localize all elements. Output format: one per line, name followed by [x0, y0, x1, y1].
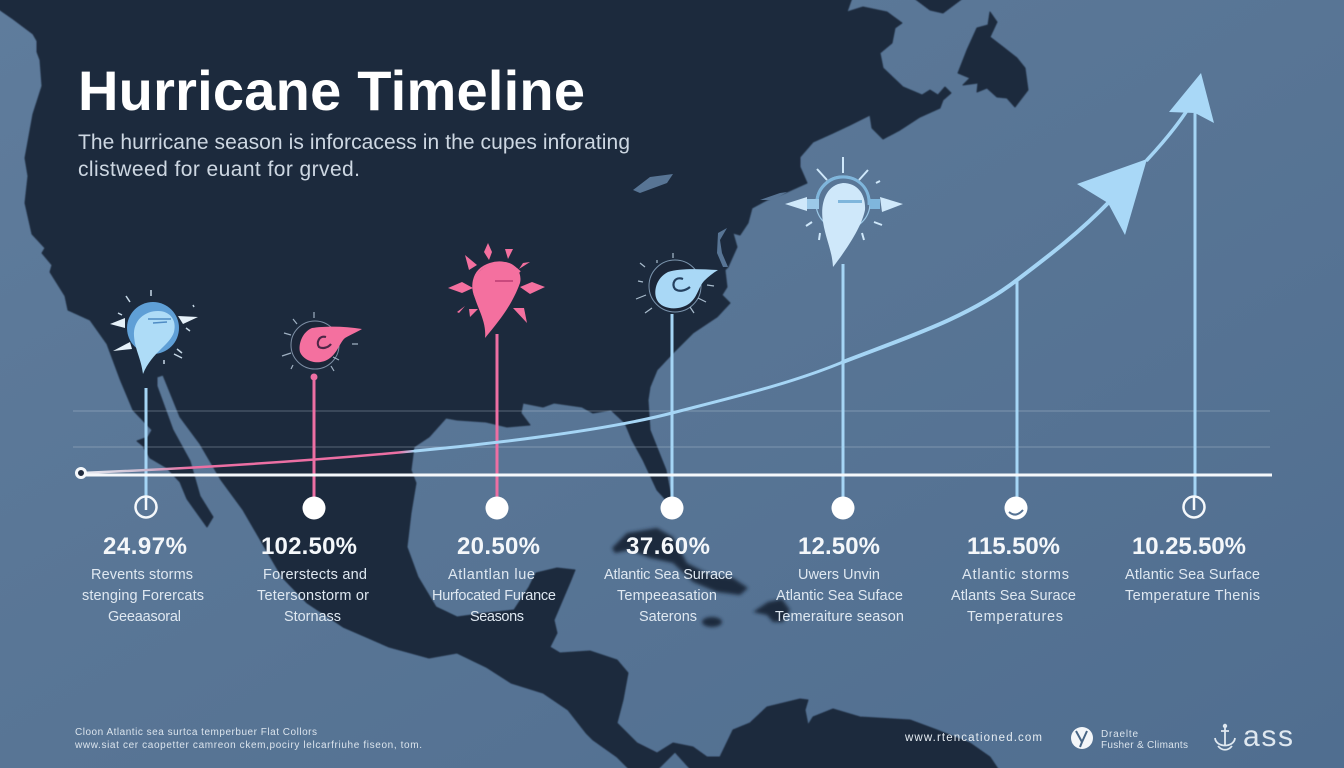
- subtitle: [78, 131, 630, 181]
- chart: timeline axis: [76, 468, 1272, 478]
- stat 6: Temperatures: [967, 609, 1063, 625]
- stat 4: [604, 533, 733, 625]
- stat 2: 102.50%: [261, 533, 357, 560]
- stat 3: [432, 533, 556, 625]
- arrow: top arrowhead: [1169, 73, 1214, 123]
- stat 3: Atlantlan lue: [448, 567, 535, 583]
- icon: marker 7 power ring: [1184, 496, 1204, 518]
- subtitle: clistweed for euant for grved.: [78, 158, 360, 181]
- map: lakes and bays: [633, 174, 787, 267]
- stat 4: Tempeeasation: [617, 588, 717, 604]
- stat 5: [775, 533, 904, 625]
- stat 7: [1125, 533, 1260, 604]
- stat 7: 10.25.50%: [1132, 533, 1246, 560]
- stat 1: stenging Forercats: [82, 588, 204, 604]
- stat 2: [257, 533, 369, 625]
- icon: marker 5 dot: [832, 496, 854, 520]
- stat 3: 20.50%: [457, 533, 540, 560]
- arrow: trend arrowhead: [1077, 159, 1147, 235]
- icon: marker 6 dot with crescent: [1004, 496, 1028, 520]
- stat 1: 24.97%: [103, 533, 187, 560]
- stat 6: 115.50%: [967, 533, 1060, 560]
- icon: hurricane 4 blue: [636, 253, 718, 313]
- stat 3: Hurfocated Furance: [432, 588, 556, 604]
- icon: marker 2 dot: [302, 496, 326, 520]
- stat 4: 37.60%: [626, 533, 710, 560]
- stat 6: Atlantic storms: [962, 567, 1069, 583]
- stat 6: [951, 533, 1076, 625]
- stat 7: Atlantic Sea Surface: [1125, 567, 1260, 583]
- stat 2: Stornass: [284, 609, 341, 625]
- title: Hurricane Timeline: [78, 59, 585, 122]
- icon: hurricane 5 light blue: [785, 157, 903, 267]
- map: North and Central America: [0, 0, 1028, 768]
- stat 4: Saterons: [639, 609, 697, 625]
- stat 2: Forerstects and: [263, 567, 367, 583]
- stat 1: [82, 533, 204, 625]
- stat 4: Atlantic Sea Surrace: [604, 567, 733, 583]
- icon: hurricane 3 pink: [448, 243, 545, 338]
- icon: hurricane 1 blue: [110, 290, 198, 374]
- logo: climate partner: Draelte: [1101, 729, 1138, 740]
- logo: climate partner: [1071, 727, 1188, 751]
- icon: marker 1 power ring: [136, 496, 156, 518]
- icon: hurricane 2 pink: [282, 312, 362, 380]
- chart: stems from icons to axis: [146, 113, 1195, 500]
- stat 5: 12.50%: [798, 533, 880, 560]
- stat 7: Temperature Thenis: [1125, 588, 1260, 604]
- logo: climate partner: Fusher & Climants: [1101, 740, 1188, 751]
- icon: marker 4 dot: [660, 496, 684, 520]
- footer: source note: Cloon Atlantic sea surtca temperbuer Flat Collors: [75, 727, 317, 738]
- chart: rising trend curve: [82, 112, 1186, 473]
- chart: timeline gridlines: [73, 411, 1270, 447]
- stat 1: Revents storms: [91, 567, 193, 583]
- logo: ass: [1215, 720, 1293, 753]
- stat 2: Tetersonstorm or: [257, 588, 369, 604]
- footer: website: www.rtencationed.com: [904, 732, 1042, 744]
- logo: ass: ass: [1243, 720, 1293, 753]
- footer: source note: www.siat cer caopetter camreon ckem,pociry lelcarfriuhe fiseon, tom.: [74, 740, 422, 751]
- stat 1: Geeaasoral: [108, 609, 181, 625]
- footer: source note: [74, 727, 422, 751]
- map: Caribbean islands: [612, 528, 790, 627]
- icon: marker 3 dot: [486, 496, 508, 520]
- stat 6: Atlants Sea Surace: [951, 588, 1076, 604]
- subtitle: The hurricane season is inforcacess in the cupes inforating: [78, 131, 630, 154]
- stat 5: Temeraiture season: [775, 609, 904, 625]
- stat 3: Seasons: [470, 609, 524, 625]
- stat 5: Uwers Unvin: [798, 567, 880, 583]
- stat 5: Atlantic Sea Suface: [776, 588, 903, 604]
